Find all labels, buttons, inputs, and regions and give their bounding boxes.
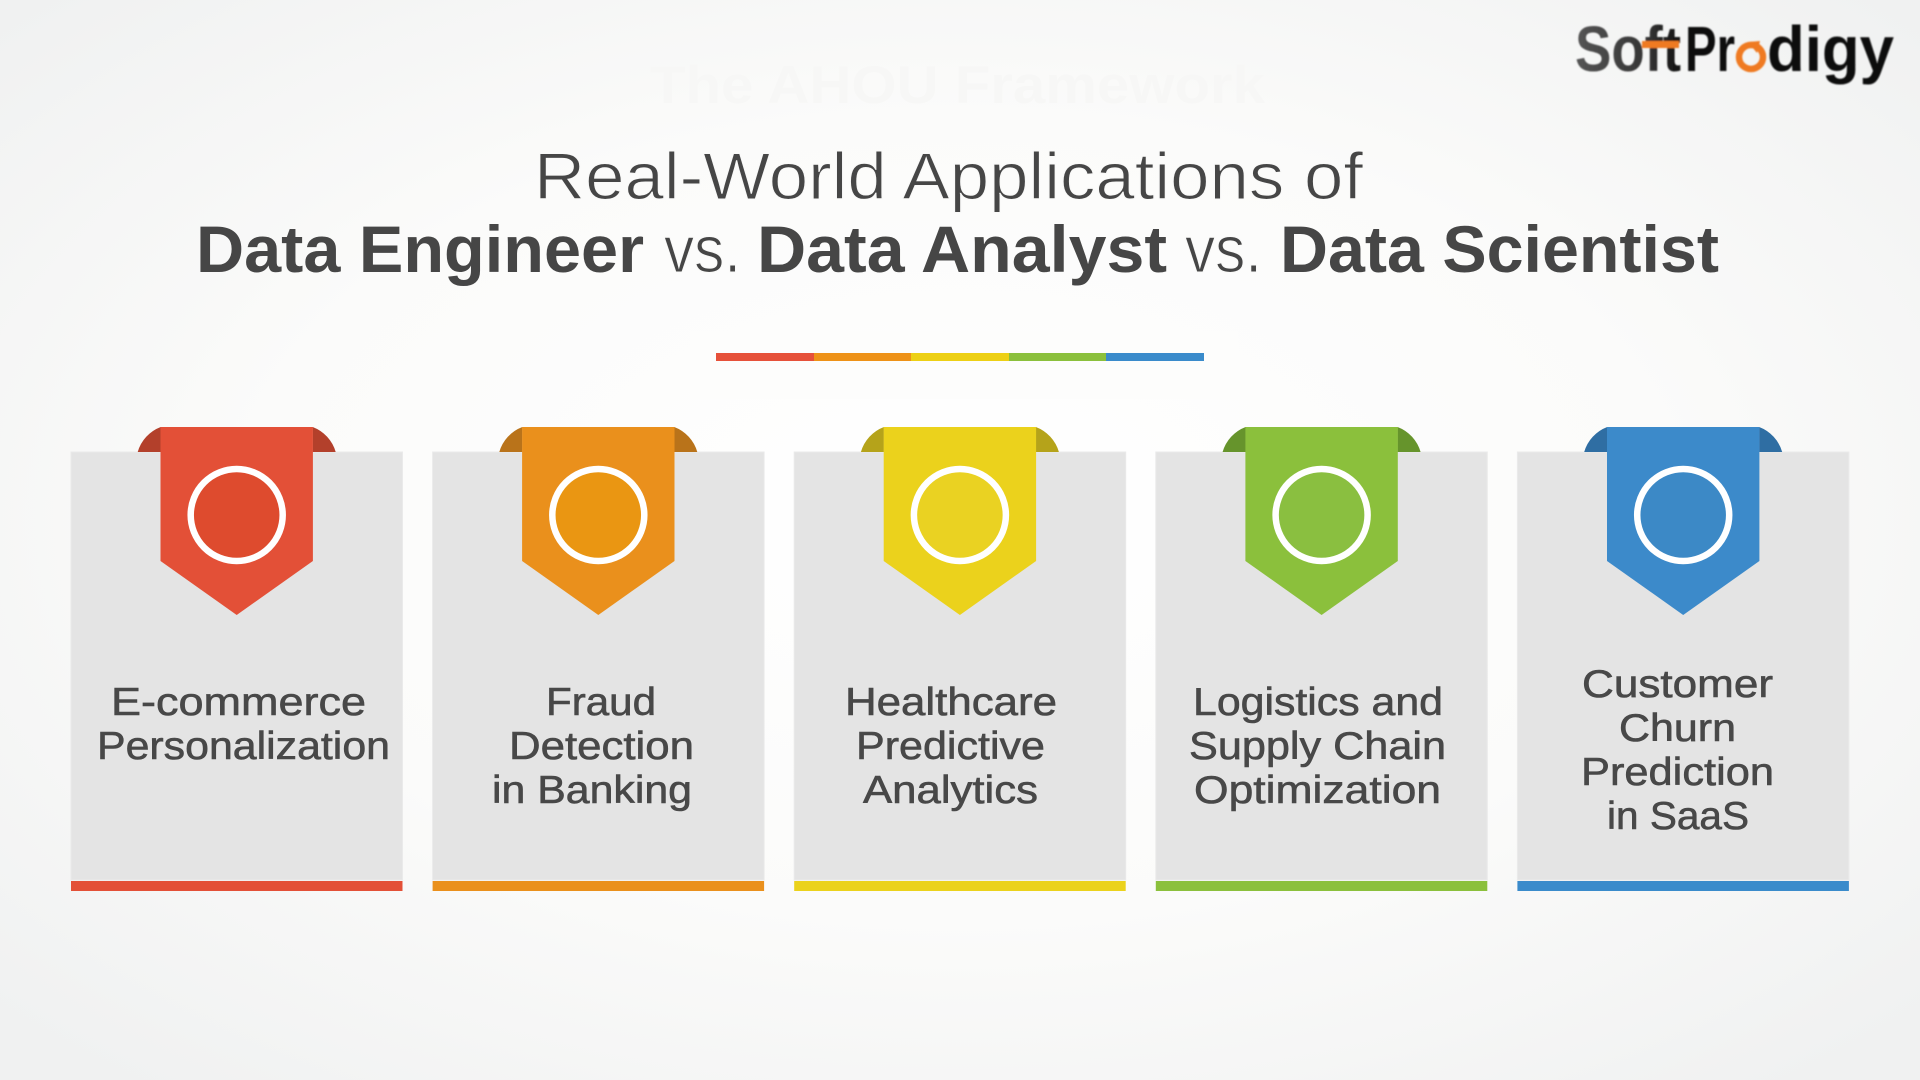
panel: logistics and supply chain optimization xyxy=(1156,427,1487,891)
label: Fraud Detection in Banking: Fraud xyxy=(546,681,656,724)
title line 2: vs. xyxy=(664,212,741,286)
title line 2: Data Scientist xyxy=(1280,212,1719,286)
label: E-commerce Personalization: E-commerce xyxy=(111,681,366,724)
label: Logistics and Supply Chain Optimization: Optimization xyxy=(1194,769,1441,812)
label: Fraud Detection in Banking xyxy=(492,681,694,812)
icon: red ribbon with circle xyxy=(138,427,336,615)
label: Healthcare Predictive Analytics: Healthcare xyxy=(845,681,1057,724)
label: Healthcare Predictive Analytics xyxy=(845,681,1057,812)
faint ghost heading: The AHOU Framework xyxy=(650,56,1266,115)
title line 2: vs. xyxy=(1185,212,1262,286)
icon: orange ribbon with circle xyxy=(499,427,697,615)
label: Customer Churn Prediction in SaaS: Prediction xyxy=(1581,751,1774,794)
title line 2: Data Engineer xyxy=(196,212,644,286)
bottom bar: green xyxy=(1156,881,1487,891)
panel: fraud detection in banking xyxy=(433,427,764,891)
title line 2: Data Analyst xyxy=(757,212,1167,286)
label: Fraud Detection in Banking: in Banking xyxy=(492,769,692,812)
panel: customer churn prediction in saas xyxy=(1517,427,1849,891)
label: E-commerce Personalization xyxy=(97,681,390,768)
label: Healthcare Predictive Analytics: Analytics xyxy=(863,769,1038,812)
label: E-commerce Personalization: Personalization xyxy=(97,725,390,768)
title line 1: Real-World Applications of xyxy=(534,139,1364,213)
label: Fraud Detection in Banking: Detection xyxy=(509,725,694,768)
label: Customer Churn Prediction in SaaS xyxy=(1581,663,1774,838)
logo: SoftProdigy: Pr xyxy=(1685,13,1735,85)
label: Logistics and Supply Chain Optimization: Logistics and xyxy=(1193,681,1443,724)
title xyxy=(196,139,1719,286)
title line 2 xyxy=(196,212,1719,286)
label: Healthcare Predictive Analytics: Predictive xyxy=(856,725,1045,768)
bottom bar: blue xyxy=(1517,881,1849,891)
label: Customer Churn Prediction in SaaS: Customer xyxy=(1582,663,1773,706)
label: Logistics and Supply Chain Optimization: Supply Chain xyxy=(1189,725,1446,768)
icon: green ribbon with circle xyxy=(1223,427,1421,615)
label: Customer Churn Prediction in SaaS: Churn xyxy=(1619,707,1736,750)
bottom bar: yellow xyxy=(794,881,1126,891)
logo: SoftProdigy: Soft xyxy=(1575,13,1681,85)
bottom bar: orange xyxy=(433,881,764,891)
icon: blue ribbon with circle xyxy=(1584,427,1782,615)
bottom bar: red xyxy=(71,881,402,891)
multicolour divider xyxy=(690,331,1238,399)
panel: healthcare predictive analytics xyxy=(794,427,1126,891)
logo: SoftProdigy: digy xyxy=(1767,13,1894,85)
icon: yellow ribbon with circle xyxy=(861,427,1059,615)
label: Customer Churn Prediction in SaaS: in SaaS xyxy=(1607,795,1749,838)
logo: SoftProdigy xyxy=(1575,13,1894,85)
panel: e-commerce personalization xyxy=(71,427,402,891)
label: Logistics and Supply Chain Optimization xyxy=(1189,681,1446,812)
